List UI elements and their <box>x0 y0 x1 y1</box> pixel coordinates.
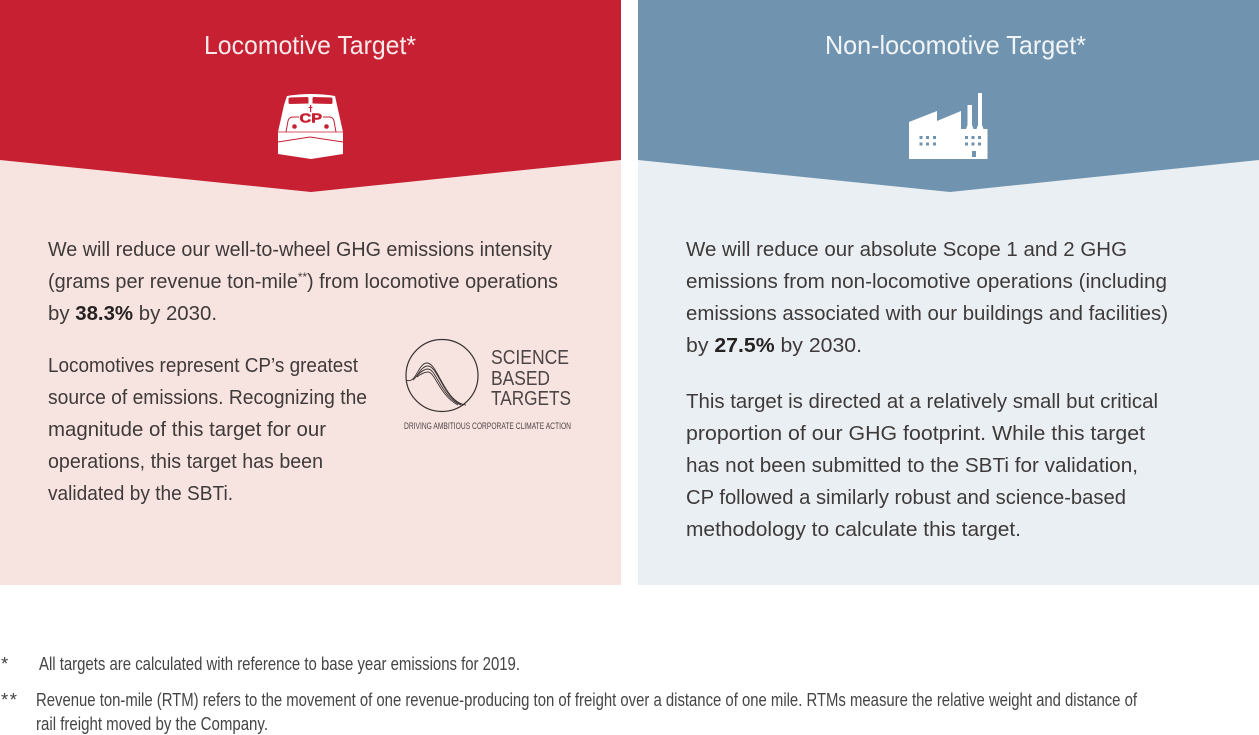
text block: locomotive target statement: ) from locomotive operations <box>307 270 558 293</box>
logo: Science Based Targets <box>404 340 571 431</box>
logo: Science Based Targets: BASED <box>491 368 550 390</box>
logo: Science Based Targets: DRIVING AMBITIOUS CORPORATE CLIMATE ACTION <box>404 421 571 431</box>
icon: factory <box>909 93 988 159</box>
text block: locomotive explanation: source of emissions. Recognizing the <box>48 386 367 409</box>
text block: non-locomotive explanation: proportion of our GHG footprint. While this target <box>686 422 1145 445</box>
icon: locomotive: CP <box>300 112 322 126</box>
text block: locomotive explanation <box>48 354 367 505</box>
footnote: base year: * <box>1 653 8 674</box>
text block: locomotive explanation: Locomotives represent CP’s greatest <box>48 354 358 377</box>
text block: non-locomotive explanation: CP followed a similarly robust and science-based <box>686 486 1126 509</box>
text block: non-locomotive explanation <box>686 390 1158 541</box>
text block: non-locomotive target statement: emissions associated with our buildings and facilities) <box>686 302 1168 325</box>
footnote: revenue ton-mile <box>1 689 1138 734</box>
footnotes <box>1 653 1138 734</box>
text block: non-locomotive target statement: We will reduce our absolute Scope 1 and 2 GHG <box>686 238 1127 261</box>
text block: non-locomotive explanation: methodology to calculate this target. <box>686 518 1021 541</box>
footnote: revenue ton-mile: ** <box>1 689 17 710</box>
panel: non-locomotive target <box>638 0 1259 585</box>
text block: locomotive target statement: (grams per revenue ton-mile <box>48 270 306 293</box>
text block: non-locomotive explanation: has not been submitted to the SBTi for validation, <box>686 454 1138 477</box>
icon: locomotive <box>278 94 343 159</box>
logo: Science Based Targets: TARGETS <box>491 388 571 410</box>
logo: Science Based Targets: SCIENCE <box>491 347 569 369</box>
text block: non-locomotive explanation: This target is directed at a relatively small but critical <box>686 390 1158 413</box>
footnote: revenue ton-mile: rail freight moved by the Company. <box>36 713 268 734</box>
heading: non-locomotive target: Non-locomotive Target* <box>825 30 1086 60</box>
footnote: base year: All targets are calculated with reference to base year emissions for 2019. <box>39 653 520 674</box>
text block: locomotive target statement: We will reduce our well-to-wheel GHG emissions intensity <box>48 238 553 261</box>
header banner: locomotive <box>0 0 621 192</box>
text block: non-locomotive target statement: emissions from non-locomotive operations (including <box>686 270 1167 293</box>
text block: non-locomotive target statement: by 27.5% by 2030. <box>686 334 862 357</box>
panel: locomotive target <box>0 0 621 585</box>
panel background: non-locomotive <box>638 0 1259 585</box>
panel background: locomotive <box>0 0 621 585</box>
text block: locomotive explanation: validated by the SBTi. <box>48 482 233 505</box>
text block: locomotive target statement: by 38.3% by 2030. <box>48 302 217 325</box>
heading: locomotive target: Locomotive Target* <box>204 30 416 60</box>
text block: locomotive target statement: ** <box>298 270 307 284</box>
header banner: non-locomotive <box>638 0 1259 192</box>
text block: locomotive explanation: magnitude of this target for our <box>48 418 326 441</box>
text block: locomotive explanation: operations, this target has been <box>48 450 323 473</box>
text block: locomotive target statement <box>48 238 558 325</box>
text block: non-locomotive target statement <box>686 238 1168 357</box>
